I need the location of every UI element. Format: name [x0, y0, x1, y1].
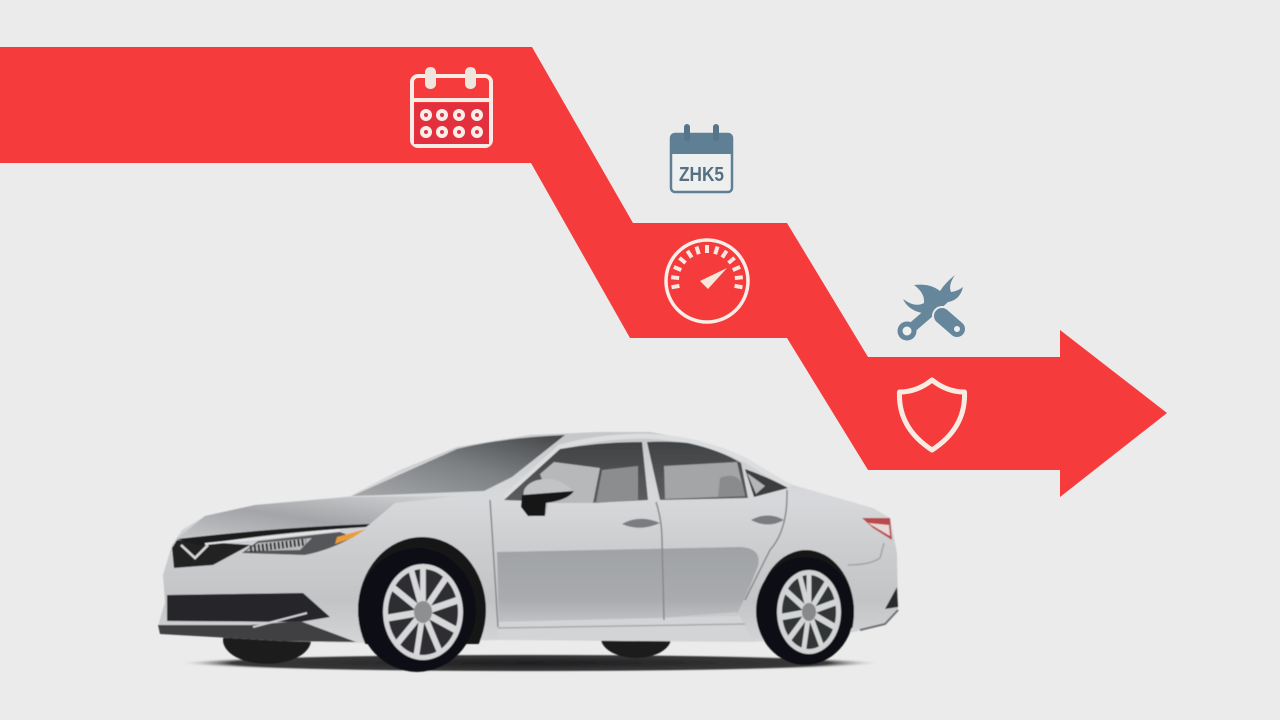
calendar garbled label: ZHK5: [679, 164, 724, 186]
door seams: [490, 490, 787, 627]
taillight: [862, 518, 892, 540]
icon: crossed wrench and spanner: [898, 275, 963, 340]
icon: blue-grey calendar: [671, 124, 732, 192]
rear wheel arch: [765, 550, 854, 628]
headlight: [177, 524, 370, 555]
rear wheel: [756, 557, 854, 665]
icon: speedometer gauge: [666, 240, 748, 322]
rear side window: [647, 442, 748, 500]
door shading band: [497, 547, 759, 622]
front wheel arch: [358, 536, 486, 645]
infographic canvas: [0, 47, 1167, 673]
ground shadow: [178, 654, 882, 672]
grille emblem: [181, 545, 208, 558]
side mirror: [522, 479, 573, 517]
front wheel: [358, 548, 476, 672]
front splitter: [158, 621, 356, 642]
door handles: [622, 519, 660, 528]
rocker panel: [498, 616, 752, 640]
icon: shield outline: [899, 380, 965, 450]
stepped red arrow: [0, 47, 1167, 497]
silver sedan car: [158, 432, 898, 683]
windshield: [352, 435, 565, 496]
rear quarter window: [745, 469, 788, 497]
grille: [172, 540, 250, 568]
far side wheels: [223, 616, 671, 664]
rear bumper details: [848, 543, 884, 565]
hood panel: [178, 496, 460, 538]
icon: white calendar on arrow: [412, 67, 491, 146]
car body shell: [158, 432, 898, 643]
front side window: [504, 442, 648, 503]
roof rail highlight: [505, 436, 790, 497]
lower bumper intake: [167, 593, 330, 622]
